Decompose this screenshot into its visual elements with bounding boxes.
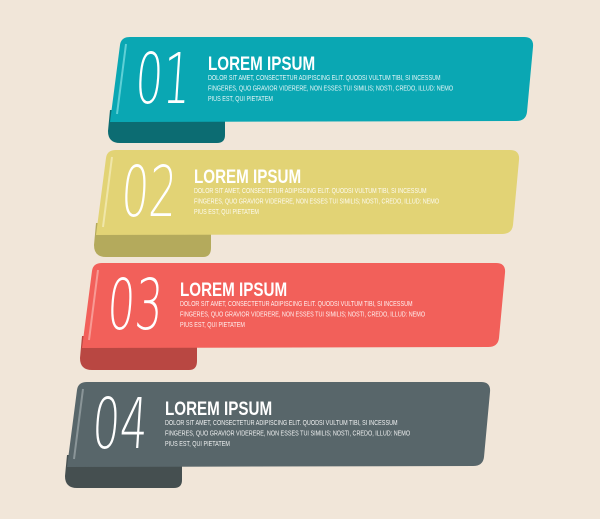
body 01: FINGERES, QUO GRAVIOR VIDERERE, NON ESSES TUI SIMILIS; NOSTI, CREDO, ILLUD: NEMO (208, 85, 453, 93)
body 03: FINGERES, QUO GRAVIOR VIDERERE, NON ESSES TUI SIMILIS; NOSTI, CREDO, ILLUD: NEMO (180, 311, 425, 319)
heading 04: LOREM IPSUM (165, 397, 272, 419)
body 02: FINGERES, QUO GRAVIOR VIDERERE, NON ESSES TUI SIMILIS; NOSTI, CREDO, ILLUD: NEMO (194, 198, 439, 206)
body 04: FINGERES, QUO GRAVIOR VIDERERE, NON ESSES TUI SIMILIS; NOSTI, CREDO, ILLUD: NEMO (165, 430, 410, 438)
heading 03: LOREM IPSUM (180, 278, 287, 300)
body 01: DOLOR SIT AMET, CONSECTETUR ADIPISCING ELIT. QUODSI VULTUM TIBI, SI INCESSUM (208, 74, 441, 82)
heading 01: LOREM IPSUM (208, 52, 315, 74)
panel: banner 03 (82, 263, 505, 348)
tab: banner 01 fold (108, 110, 225, 143)
number 02: 02 (119, 151, 179, 233)
panel: banner 01 (110, 37, 533, 122)
body 03: DOLOR SIT AMET, CONSECTETUR ADIPISCING ELIT. QUODSI VULTUM TIBI, SI INCESSUM (180, 300, 413, 308)
body 04: DOLOR SIT AMET, CONSECTETUR ADIPISCING ELIT. QUODSI VULTUM TIBI, SI INCESSUM (165, 419, 398, 427)
body 02 (194, 187, 439, 216)
panel: banner 02 (96, 150, 519, 235)
tab: banner 04 fold (65, 455, 182, 488)
number 04: 04 (90, 383, 150, 465)
banner 01 (108, 37, 533, 143)
body 03 (180, 300, 425, 329)
number 03: 03 (105, 264, 165, 346)
tab: banner 03 fold (80, 336, 197, 370)
body 01 (208, 74, 453, 103)
banner 04 (65, 382, 490, 488)
banner 03 (80, 263, 505, 370)
heading 02: LOREM IPSUM (194, 165, 301, 187)
body 04: PIUS EST, QUI PIETATEM (165, 440, 230, 448)
banner 02 (94, 150, 519, 257)
tab: banner 02 fold (94, 223, 211, 257)
panel: banner 04 (67, 382, 490, 467)
body 02: PIUS EST, QUI PIETATEM (194, 208, 259, 216)
body 01: PIUS EST, QUI PIETATEM (208, 95, 273, 103)
body 04 (165, 419, 410, 448)
number 01: 01 (133, 38, 193, 120)
body 02: DOLOR SIT AMET, CONSECTETUR ADIPISCING ELIT. QUODSI VULTUM TIBI, SI INCESSUM (194, 187, 427, 195)
body 03: PIUS EST, QUI PIETATEM (180, 321, 245, 329)
